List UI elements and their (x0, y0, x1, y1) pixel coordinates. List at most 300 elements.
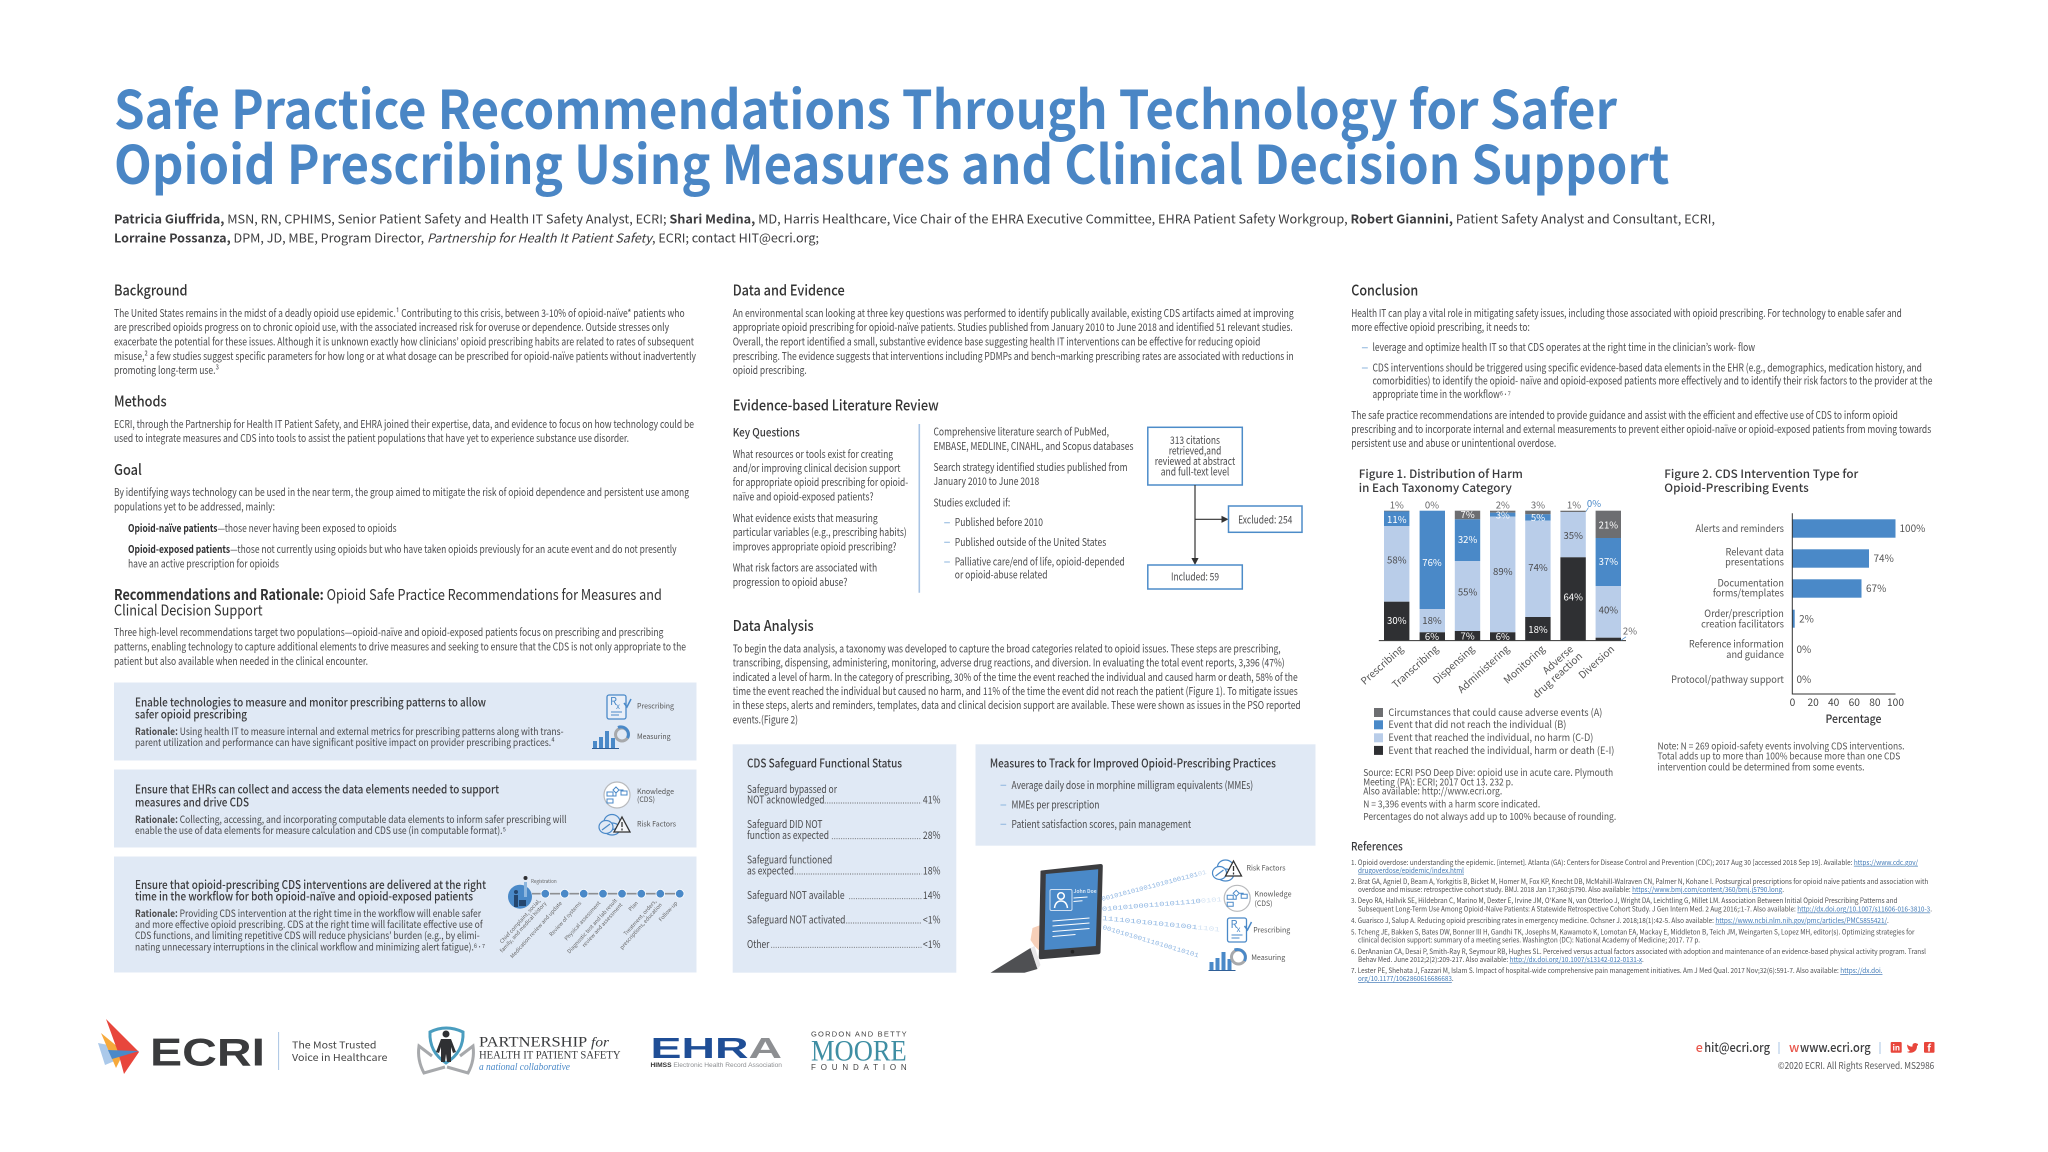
box: excluded (1228, 506, 1302, 532)
logo: ECRI: The Most Trusted (292, 1038, 377, 1052)
recommendation 3 rationale: Rationale: Providing CDS intervention at the right time in the workflow will enable safer (135, 905, 481, 920)
text: data analysis: indicated a level of harm. In the category of prescribing, 30% of the time the event reached the individual and caused harm or death, 58% of the (733, 670, 1298, 685)
icon: facebook (1924, 1040, 1934, 1054)
contact links (1696, 1037, 1880, 1056)
heading: recommendations and rationale (114, 584, 662, 620)
figure 2 note: intervention could be determined from some events. (1658, 759, 1864, 773)
key questions: and/or improving clinical decision support (733, 461, 901, 476)
recommendation 3 rationale: CDS functions, and limiting repetitive CDS will reduce physicians’ burden (e.g., by elimi- (135, 927, 480, 942)
bar value labels: 0% (1425, 498, 1439, 512)
binary data streams: 00101010100110101001101 01 (1101, 869, 1207, 903)
icon: tablet: John Doe (1074, 888, 1097, 895)
recommendation 3 heading: Ensure that opioid-prescribing CDS interventions are delivered at the right (135, 876, 486, 893)
row: did not function (747, 817, 941, 843)
text: background: exacerbate the potential for these issues. Although it is unknown exactly how clinicians’ opioid prescribing habits are related to rates of subsequent (114, 334, 694, 350)
workflow step labels: Review of systems (547, 899, 584, 938)
bar category labels: Relevant data (1726, 543, 1784, 558)
workflow step labels: Plan (626, 899, 640, 913)
text: conclusion: The safe practice recommendations are intended to provide guidance and assist with the efficient and effective use of CDS to inform opioid (1351, 408, 1898, 423)
recommendation 3 heading (135, 876, 486, 905)
figure 1 source notes: Meeting (PA): ECRI; 2017 Oct 13. 232 p. (1363, 774, 1513, 788)
icon: measuring (1208, 949, 1246, 970)
heading: evidence-based literature review: Evidence-based Literature Review (733, 394, 939, 415)
logo: Moore Foundation: GORDON AND BETTY (811, 1030, 907, 1038)
search strategy text: or opioid-abuse related (955, 568, 1048, 582)
row: functioned: as expected (747, 864, 794, 878)
recommendation 1 rationale: Rationale: Using health IT to measure internal and external metrics for prescribing patterns along with trans- (135, 723, 564, 738)
axis ticks (1790, 694, 1904, 709)
bar value labels: 11% (1387, 512, 1407, 526)
search strategy text: Search strategy identified studies published from (934, 460, 1128, 475)
key questions (733, 425, 908, 590)
label: measuring: Measuring (1251, 952, 1286, 963)
reference list: 3. Deyo RA, Hallvik SE, Hildebran C, Marino M, Dexter E, Irvine JM, O’Kane N, van Otterloo J, Wright DA, Leichtling G, Millet LM. Association Between Initial Opioid Prescribing Patterns and (1351, 895, 1898, 905)
text: data analysis: events.(Figure 2) (733, 712, 798, 728)
panel: CDS safeguard functional status (733, 744, 956, 973)
row: bypassed: Safeguard bypassed or (747, 782, 838, 797)
text: background: are prescribed opioids progress on to chronic opioid use, with the associated increased risk for overuse or dependence. Outside stresses only (114, 320, 669, 335)
reference list: 4. Guarisco J, Salup A. Reducing opioid prescribing rates in emergency medicine. Ochsner J. 2018;18(1):42-5. Also available: https://www.ncbi.nlm.nih.gov/pmc/articles/PMC5855421/. (1351, 915, 1889, 925)
figure 1 source notes: Percentages do not always add up to 100% because of rounding. (1363, 809, 1616, 823)
key questions: What risk factors are associated with (733, 560, 877, 576)
category labels: Administering (1454, 641, 1512, 696)
recommendation 1 heading: Enable technologies to measure and monitor prescribing patterns to allow (135, 694, 486, 711)
text: conclusion: persistent use and abuse or unintentional overdose. (1351, 436, 1556, 451)
figure 1 source notes (1363, 765, 1616, 823)
box: included: Included: 59 (1171, 570, 1219, 584)
bar value labels: 1% (1567, 498, 1581, 512)
logo: Partnership for Health IT Patient Safety: a national collaborative (479, 1062, 570, 1073)
box: citations: 313 citations (1170, 433, 1220, 448)
bar value labels: 76% (1422, 555, 1442, 569)
key questions: Key Questions (733, 425, 800, 441)
workflow step labels: Treatment, orders, (622, 897, 659, 937)
recommendation 3 heading: time in the workflow for both opioid-naïve and opioid-exposed patients (135, 888, 473, 905)
figure 1 legend: Event that did not reach the individual (B) (1388, 716, 1566, 731)
bar value labels: 3% (1496, 508, 1510, 522)
panel: recommendation 2 (114, 770, 696, 848)
icon: risk factors (599, 814, 630, 835)
key questions: particular variables (e.g., prescribing habits) (733, 525, 907, 540)
text: data and evidence: opioid prescribing. (733, 363, 807, 378)
row: did not function: function as expected (747, 828, 829, 843)
row: bypassed: 41% (923, 792, 941, 808)
bar category labels (1671, 520, 1784, 686)
footer logos (98, 1019, 907, 1074)
row: functioned: Safeguard functioned (747, 852, 832, 868)
logo: ECRI: Voice in Healthcare (292, 1050, 388, 1064)
icon: prescribing: x (1236, 924, 1240, 935)
arrow: to excluded and included (1191, 485, 1228, 565)
recommendation 3 rationale: nating unnecessary interruptions in the clinical workflow and minimizing alert fatigue).⁶·⁷ (135, 938, 485, 954)
search strategy text: Comprehensive literature search of PubMed, (934, 424, 1109, 440)
workflow step labels: family, and medical history (498, 899, 548, 954)
search strategy text: EMBASE, MEDLINE, CINAHL, and Scopus databases (934, 439, 1134, 454)
text: recommendations intro: Three high-level recommendations target two populations—opioid-naïve and opioid-exposed patients focus on prescribing and prescribing (114, 625, 663, 640)
row: did not function: Safeguard DID NOT (747, 817, 822, 832)
text: data and evidence (733, 306, 1294, 378)
text: conclusion (1351, 306, 1933, 451)
bar category labels: Reference information (1689, 636, 1784, 651)
workflow step labels: Physical assessment (562, 899, 602, 942)
text: methods: ECRI, through the Partnership for Health IT Patient Safety, and EHRA joined their expertise, data, and evidence to focus on how technology could be (114, 417, 694, 432)
icon: hand holding tablet (990, 925, 1054, 973)
recommendation 2 heading (135, 780, 499, 811)
text: background: promoting long-term use.³ (114, 363, 219, 378)
heading: recommendations and rationale: Clinical Decision Support (114, 599, 263, 620)
logo: Partnership for Health IT Patient Safety: PARTNERSHIP for (479, 1034, 610, 1050)
figure 2 title: Figure 2. CDS Intervention Type for (1664, 466, 1859, 482)
icon: facebook: f (1927, 1040, 1932, 1054)
recommendation 3 rationale (135, 905, 485, 954)
panel: measures to track (976, 744, 1316, 846)
search strategy text: Published before 2010 (955, 515, 1043, 530)
icon: prescribing: x (616, 701, 620, 712)
row: functioned (747, 852, 941, 878)
contact and copyright (1696, 1037, 1934, 1072)
key questions: for appropriate opioid prescribing for opioid- (733, 475, 908, 490)
reference list: Behav Med. June 2012;2(2):209-217. Also available: http://dx.doi.org/10.1007/s13142-012-0131-x. (1358, 954, 1644, 964)
figure 1 legend: Event that reached the individual, harm or death (E-I) (1388, 742, 1614, 757)
figure 1 legend (1374, 704, 1614, 757)
bar value labels: 89% (1493, 564, 1513, 578)
row: functioned: 18% (923, 864, 941, 878)
logo: Moore Foundation: MOORE (811, 1034, 907, 1068)
text: recommendations intro: patterns, enabling technology to capture additional elements to drive measures and seeking to ensure that the CDS is not only appropriate to the (114, 640, 686, 654)
text: methods: used to integrate measures and CDS into tools to assist the patient populations that have yet to experience substance use disorder. (114, 431, 629, 446)
figure 1 title: in Each Taxonomy Category (1359, 480, 1512, 496)
title: Safe Practice Recommendations Through Technology for Safer (114, 69, 1618, 145)
title: Opioid Prescribing Using Measures and Clinical Decision Support (114, 124, 1670, 200)
title (114, 69, 1670, 200)
text: data analysis: transcribing, dispensing, administering, monitoring, adverse drug reactions, and diversion. In evaluating the total event reports, 3,396 (47%) (733, 656, 1285, 670)
contact links: hit@ecri.org (1704, 1037, 1771, 1056)
reference list: 7. Lester PE, Shehata J, Fazzari M, Islam S. Impact of hospital-wide comprehensive pain management initiatives. Am J Med Qual. 2017 Nov;32(6):591-7. Also available: https://dx.doi. (1351, 965, 1883, 975)
reference list: 1. Opioid overdose: understanding the epidemic. [internet]. Atlanta (GA): Centers for Disease Control and Prevention (CDC); 2017 Aug 30 [accessed 2018 Sep 19]. Available: https://www.cdc.gov/ (1351, 857, 1918, 867)
figure 1 legend: Circumstances that could cause adverse events (A) (1388, 704, 1602, 719)
workflow step labels: Medication review and update (508, 899, 564, 960)
panel: measures to track: Measures to Track for Improved Opioid-Prescribing Practices (990, 754, 1276, 771)
stacked bar chart (1357, 496, 1637, 701)
workflow step labels: prescriptions, education (618, 901, 664, 951)
figure 1 legend: Event that reached the individual, no harm (C-D) (1388, 729, 1593, 744)
recommendation 2 heading: Ensure that EHRs can collect and access the data elements needed to support (135, 780, 499, 797)
search strategy text (934, 424, 1134, 582)
icon: prescribing (607, 693, 631, 719)
figure 1 source notes: Source: ECRI PSO Deep Dive: opioid use in acute care. Plymouth (1363, 765, 1613, 779)
row: other: <1% (923, 937, 941, 952)
reference list: 6. DerAnanian CA, Desai P, Smith-Ray R, Seymour RB, Hughes SL. Perceived versus actual factors associated with adoption and maintenance of an evidence-based physical activity program. Transl (1351, 946, 1926, 956)
axis ticks: 20 (1807, 694, 1819, 709)
icon: patient registration (508, 876, 532, 909)
contact links: www.ecri.org (1800, 1037, 1871, 1056)
heading: background: Background (114, 280, 188, 300)
key questions: What resources or tools exist for creating (733, 447, 893, 462)
bar category labels: Alerts and reminders (1696, 520, 1784, 535)
panel: measures to track: Average daily dose in morphine milligram equivalents (MMEs) (1012, 778, 1253, 793)
axis ticks: 60 (1849, 694, 1860, 709)
bar value labels (1796, 520, 1925, 686)
label: risk factors: Risk Factors (1246, 862, 1286, 874)
bar category labels: Order/prescription (1704, 605, 1784, 620)
bar value labels: 6% (1425, 629, 1439, 643)
contact links: w (1789, 1037, 1800, 1056)
heading: goal: Goal (114, 459, 142, 480)
row: bypassed: NOT acknowledged (747, 792, 824, 808)
heading: data analysis: Data Analysis (733, 615, 814, 636)
panel: recommendation 1 (114, 682, 696, 760)
panel: measures to track: Patient satisfaction scores, pain management (1012, 817, 1191, 832)
text: data analysis: To begin the data analysis, a taxonomy was developed to capture the broad categories related to opioid issues. These steps are prescribing, (733, 642, 1281, 656)
text: data and evidence: Overall, the report identified a small, substantive evidence base suggesting health IT interventions can be effective for reducing opioid (733, 334, 1260, 350)
binary data streams: 11110101010101001 1101 (1102, 915, 1220, 934)
authors: Lorraine Possanza, DPM, JD, MBE, Program Director, Partnership for Health It Patient Safety , ECRI; contact HIT@ecri.org; (114, 228, 819, 246)
box: included (1148, 565, 1242, 589)
bar value labels: 30% (1387, 613, 1407, 627)
icon: linkedin: in (1892, 1042, 1900, 1054)
reference list: org/10.1177/1062860616686683. (1358, 973, 1454, 983)
bar value labels: 0% (1796, 671, 1811, 686)
figure 1 title (1359, 466, 1523, 496)
heading: conclusion: Conclusion (1351, 280, 1418, 300)
workflow step labels: Diagnostic test and lab result (565, 897, 619, 955)
search strategy text: January 2010 to June 2018 (934, 474, 1039, 489)
icon: prescribing (1228, 916, 1252, 942)
bar value labels (1387, 496, 1637, 643)
text: data and evidence: appropriate opioid prescribing for opioid-naïve patients. Studies published from January 2010 to June 2018 and identified 51 relevant studies. (733, 320, 1293, 335)
flow diagram (1148, 427, 1302, 589)
text: data analysis: in these steps, alerts and reminders, templates, data and clinical decision support are available. These were shown as issues in the PSO reported (733, 698, 1301, 713)
reference list: overdose and misuse: retrospective cohort study. BMJ. 2018 Jan 17;360:j5790. Also available: https://www.bmj.com/content/360/bmj.j5790.long. (1358, 884, 1784, 894)
recommendation 1 rationale (135, 723, 564, 749)
bar category labels: Protocol/pathway support (1671, 671, 1784, 686)
text: conclusion: Health IT can play a vital role in mitigating safety issues, including those associated with opioid prescribing. For technology to enable safer and (1351, 306, 1902, 321)
text: methods (114, 417, 694, 446)
bar value labels: 7% (1461, 628, 1475, 642)
text: data analysis (733, 642, 1301, 728)
workflow step labels: Chief complaint, social, (498, 897, 543, 945)
illustration: tablet data to measures (990, 860, 1292, 973)
category labels: drug reaction (1529, 648, 1585, 701)
label: risk factors: Risk Factors (637, 818, 677, 830)
text: goal (114, 485, 689, 572)
icon: prescribing: R (610, 693, 617, 709)
figure 2 note (1658, 738, 1904, 773)
label: knowledge: (CDS) (1254, 898, 1272, 909)
binary data streams: 0010101001110100110101 (1102, 924, 1200, 959)
bar value labels: 2% (1799, 610, 1814, 626)
bar value labels: 1% (1390, 498, 1404, 512)
recommendation 1 heading: safer opioid prescribing (135, 706, 247, 723)
references (1351, 839, 1932, 983)
column: right (1351, 280, 1933, 983)
icon: measuring (592, 727, 628, 748)
category labels: Dispensing (1429, 641, 1477, 687)
label: knowledge: (CDS) (637, 794, 655, 805)
bar value labels: 58% (1387, 552, 1407, 566)
bar category labels: presentations (1725, 554, 1784, 569)
bar value labels: 2% (1623, 624, 1637, 638)
axis ticks: 100 (1887, 694, 1904, 709)
workflow step labels (498, 897, 679, 960)
logo: EHRA: HIMSS Electronic Health Record Association (650, 1063, 782, 1069)
bar value labels: 18% (1528, 622, 1548, 636)
recommendation 3 rationale: and more effective opioid prescribing. CDS at the right time will facilitate effective use of (135, 916, 483, 931)
workflow timeline (498, 876, 684, 960)
heading: references: References (1351, 839, 1403, 855)
text: goal: Opioid-naïve patients—those never having been exposed to opioids (128, 521, 397, 536)
box: citations: retrieved,and (1169, 444, 1221, 458)
text: data and evidence: prescribing. The evidence suggests that interventions including PDMPs and bench¬marking prescribing rates are associated with reductions in (733, 349, 1294, 364)
text: data and evidence: An environmental scan looking at three key questions was performed to identify publically available, existing CDS artifacts aimed at improving (733, 306, 1294, 321)
bar value labels: 67% (1866, 580, 1886, 595)
panel: CDS safeguard functional status: CDS Safeguard Functional Status (747, 754, 902, 771)
text: conclusion: more effective opioid prescribing, it needs to: (1351, 320, 1530, 335)
figure 2 title: Opioid-Prescribing Events (1664, 480, 1809, 496)
logo: Partnership for Health IT Patient Safety (419, 1028, 621, 1073)
bar category labels: forms/templates (1713, 585, 1784, 600)
row: not available: 14% (923, 888, 941, 903)
figure 1 source notes: N = 3,396 events with a harm score indicated. (1363, 796, 1540, 810)
label: measuring: Measuring (637, 731, 671, 742)
row: not activated: Safeguard NOT activated (747, 912, 845, 928)
axis ticks: 80 (1869, 694, 1881, 709)
category labels: Diversion (1574, 641, 1617, 682)
recommendation 2 rationale: Rationale: Collecting, accessing, and incorporating computable data elements to inform safer prescribing will (135, 811, 567, 826)
key questions: What evidence exists that measuring (733, 511, 878, 526)
horizontal bar chart (1671, 513, 1925, 727)
search strategy text: Published outside of the United States (955, 535, 1106, 550)
text: conclusion: appropriate time in the workflow⁶·⁷ (1372, 387, 1511, 402)
recommendation 1 rationale: parent utilization and performance can have significant positive impact on provider prescribing practices.⁴ (135, 734, 555, 749)
icon: knowledge (1224, 885, 1250, 911)
row: other (747, 937, 941, 952)
bar value labels: 37% (1599, 554, 1618, 568)
icon: tablet (1039, 864, 1103, 959)
bar value labels: 5% (1531, 510, 1545, 524)
workflow step labels: review and assessment (580, 901, 624, 949)
search strategy text: Studies excluded if: (934, 496, 1010, 510)
row: did not function: 28% (923, 828, 941, 843)
figure 2 title (1664, 466, 1859, 496)
category labels (1357, 641, 1617, 701)
recommendation 2 heading: measures and drive CDS (135, 794, 249, 811)
figure 1: distribution of harm (1357, 466, 1637, 823)
bar value labels: 74% (1874, 550, 1894, 565)
column: middle (733, 280, 1316, 973)
bar category labels: creation facilitators (1701, 615, 1784, 630)
column: left (114, 280, 696, 972)
text: goal: Opioid-exposed patients—those not currently using opioids but who have taken opioids previously for an acute event and do not presently (128, 542, 677, 557)
logo: EHRA: EHR A (650, 1033, 782, 1065)
text: goal: By identifying ways technology can be used in the near term, the group aimed to mitigate the risk of opioid dependence and persistent use among (114, 485, 689, 500)
bar value labels: 35% (1563, 528, 1583, 542)
bar value labels: 3% (1531, 498, 1545, 512)
reference list: clinical decision support: summary of a meeting series. Washington (DC): National Academy of Medicine; 2017. 77 p. (1358, 934, 1700, 944)
bar value labels: 64% (1563, 590, 1583, 604)
logo: ECRI (98, 1019, 388, 1074)
panel: measures to track: MMEs per prescription (1012, 798, 1100, 812)
box: citations: and full-text level (1161, 464, 1229, 480)
row: not activated (747, 912, 941, 928)
category labels: Adverse (1538, 641, 1576, 677)
bar value labels: 0% (1796, 641, 1811, 656)
figure 2: CDS intervention type (1658, 466, 1925, 773)
label: prescribing: Prescribing (1253, 925, 1291, 936)
text: background (114, 306, 696, 378)
bar value labels: 7% (1461, 507, 1475, 521)
bar value labels: 74% (1528, 560, 1548, 574)
text: recommendations intro: patient but also available when needed in the clinical encounter. (114, 654, 368, 669)
label: registration: Registration (531, 877, 557, 885)
text: recommendations intro (114, 625, 686, 669)
binary data streams: 0101010001101011110 0101 (1102, 896, 1222, 913)
icon: knowledge (604, 782, 630, 808)
bar category labels: and guidance (1726, 646, 1784, 661)
axis ticks: 40 (1828, 694, 1840, 709)
text: background: misuse,² a few studies suggest specific parameters for how long or at what dosage can be prescribed for opioid-naïve patients without inadvertently (114, 349, 696, 364)
row: bypassed (747, 782, 941, 808)
figure 1 source notes: Also available: http://www.ecri.org. (1363, 784, 1502, 798)
heading: recommendations and rationale: Recommendations and Rationale: Opioid Safe Practice Recommendations for Measures and (114, 584, 662, 605)
bar value labels: 55% (1458, 584, 1477, 598)
copyright: ©2020 ECRI. All Rights Reserved. MS2986 (1778, 1058, 1934, 1072)
authors (114, 210, 1715, 246)
label: knowledge (1254, 889, 1292, 909)
reference list: 5. Tcheng JE, Bakken S, Bates DW, Bonner III H, Gandhi TK, Josephs M, Kawamoto K, Lomotan EA, Mackay E, Middleton B, Teich JM, Weingarten S, Lopez MH, editor(s). Optimizing strategies for (1351, 926, 1915, 936)
category labels: Prescribing (1357, 641, 1406, 688)
reference list: Subsequent Long-Term Use Among Opioid-Naïve Patients: A Statewide Retrospective Cohort Study. J Gen Intern Med. 2 Aug 2016;:1-7. Also available: http://dx.doi.org/10.1007/s11606-016-3810-3. (1358, 904, 1932, 914)
icon: linkedin (1891, 1042, 1902, 1054)
row: not available: Safeguard NOT available (747, 888, 845, 903)
recommendation 2 rationale (135, 811, 567, 837)
text: background: The United States remains in the midst of a deadly opioid use epidemic.¹ Contributing to this crisis, between 3-10% of opioid-naïve* patients who (114, 306, 685, 321)
figure 1 title: Figure 1. Distribution of Harm (1359, 466, 1523, 482)
figure 2 note: Total adds up to more than 100% because more than one CDS (1658, 749, 1901, 763)
icon: twitter (1907, 1043, 1918, 1053)
bar category labels: Documentation (1718, 574, 1784, 589)
search strategy text: Palliative care/end of life, opioid-depended (955, 554, 1125, 570)
label: knowledge: Knowledge (1254, 889, 1292, 900)
text: conclusion: CDS interventions should be triggered using specific evidence-based data elements in the EHR (e.g., demographics, medication history, and (1372, 360, 1922, 376)
recommendation 2 rationale: enable the use of data elements for measure calculation and CDS use (in computable format).⁵ (135, 822, 506, 837)
text: conclusion: leverage and optimize health IT so that CDS operates at the right time in the clinician’s work- flow (1372, 340, 1755, 355)
bar value labels: 21% (1599, 518, 1618, 532)
label: knowledge: Knowledge (637, 786, 674, 797)
icon: risk factors (1212, 860, 1242, 881)
bar value labels: 32% (1458, 532, 1477, 546)
bar value labels: 2% (1496, 498, 1510, 512)
contact links: e (1696, 1037, 1703, 1056)
reference list: 2. Brat GA, Agniel D, Beam A, Yorkgitis B, Bicket M, Homer M, Fox KP, Knecht DB, McMahill-Walraven CN, Palmer N, Kohane I. Postsurgical prescriptions for opioid naïve patients and association with (1351, 876, 1928, 886)
binary data streams (1101, 869, 1222, 959)
authors: Patricia Giuffrida, MSN, RN, CPHIMS, Senior Patient Safety and Health IT Safety Analyst, ECRI; Shari Medina, MD, Harris Healthcare, Vice Chair of the EHRA Executive Committee, EHRA Patient Safety Workgroup, Robert Giannini, Patient Safety Analyst and Consultant, ECRI, (114, 210, 1715, 228)
axis title: Percentage (1826, 711, 1882, 727)
text: goal: populations yet to be addressed, mainly: (114, 500, 275, 514)
text: data analysis: time the event reached the individual but caused no harm, and 11% of the time the event did not reach the patient (Figure 1). To mitigate issues (733, 684, 1298, 699)
box: excluded: Excluded: 254 (1238, 512, 1292, 528)
category labels: Transcribing (1388, 641, 1441, 691)
reference list (1351, 857, 1932, 983)
logo: ECRI: ECRI (150, 1032, 265, 1074)
panel: recommendation 3 (114, 856, 696, 972)
key questions: improves appropriate opioid prescribing? (733, 540, 896, 554)
icon: prescribing: R (1230, 916, 1238, 932)
bar value labels: 6% (1496, 629, 1510, 643)
logo: Moore Foundation: FOUNDATION (811, 1063, 907, 1072)
logo: Partnership for Health IT Patient Safety: HEALTH IT PATIENT SAFETY (479, 1048, 621, 1062)
category labels: Monitoring (1500, 641, 1548, 686)
